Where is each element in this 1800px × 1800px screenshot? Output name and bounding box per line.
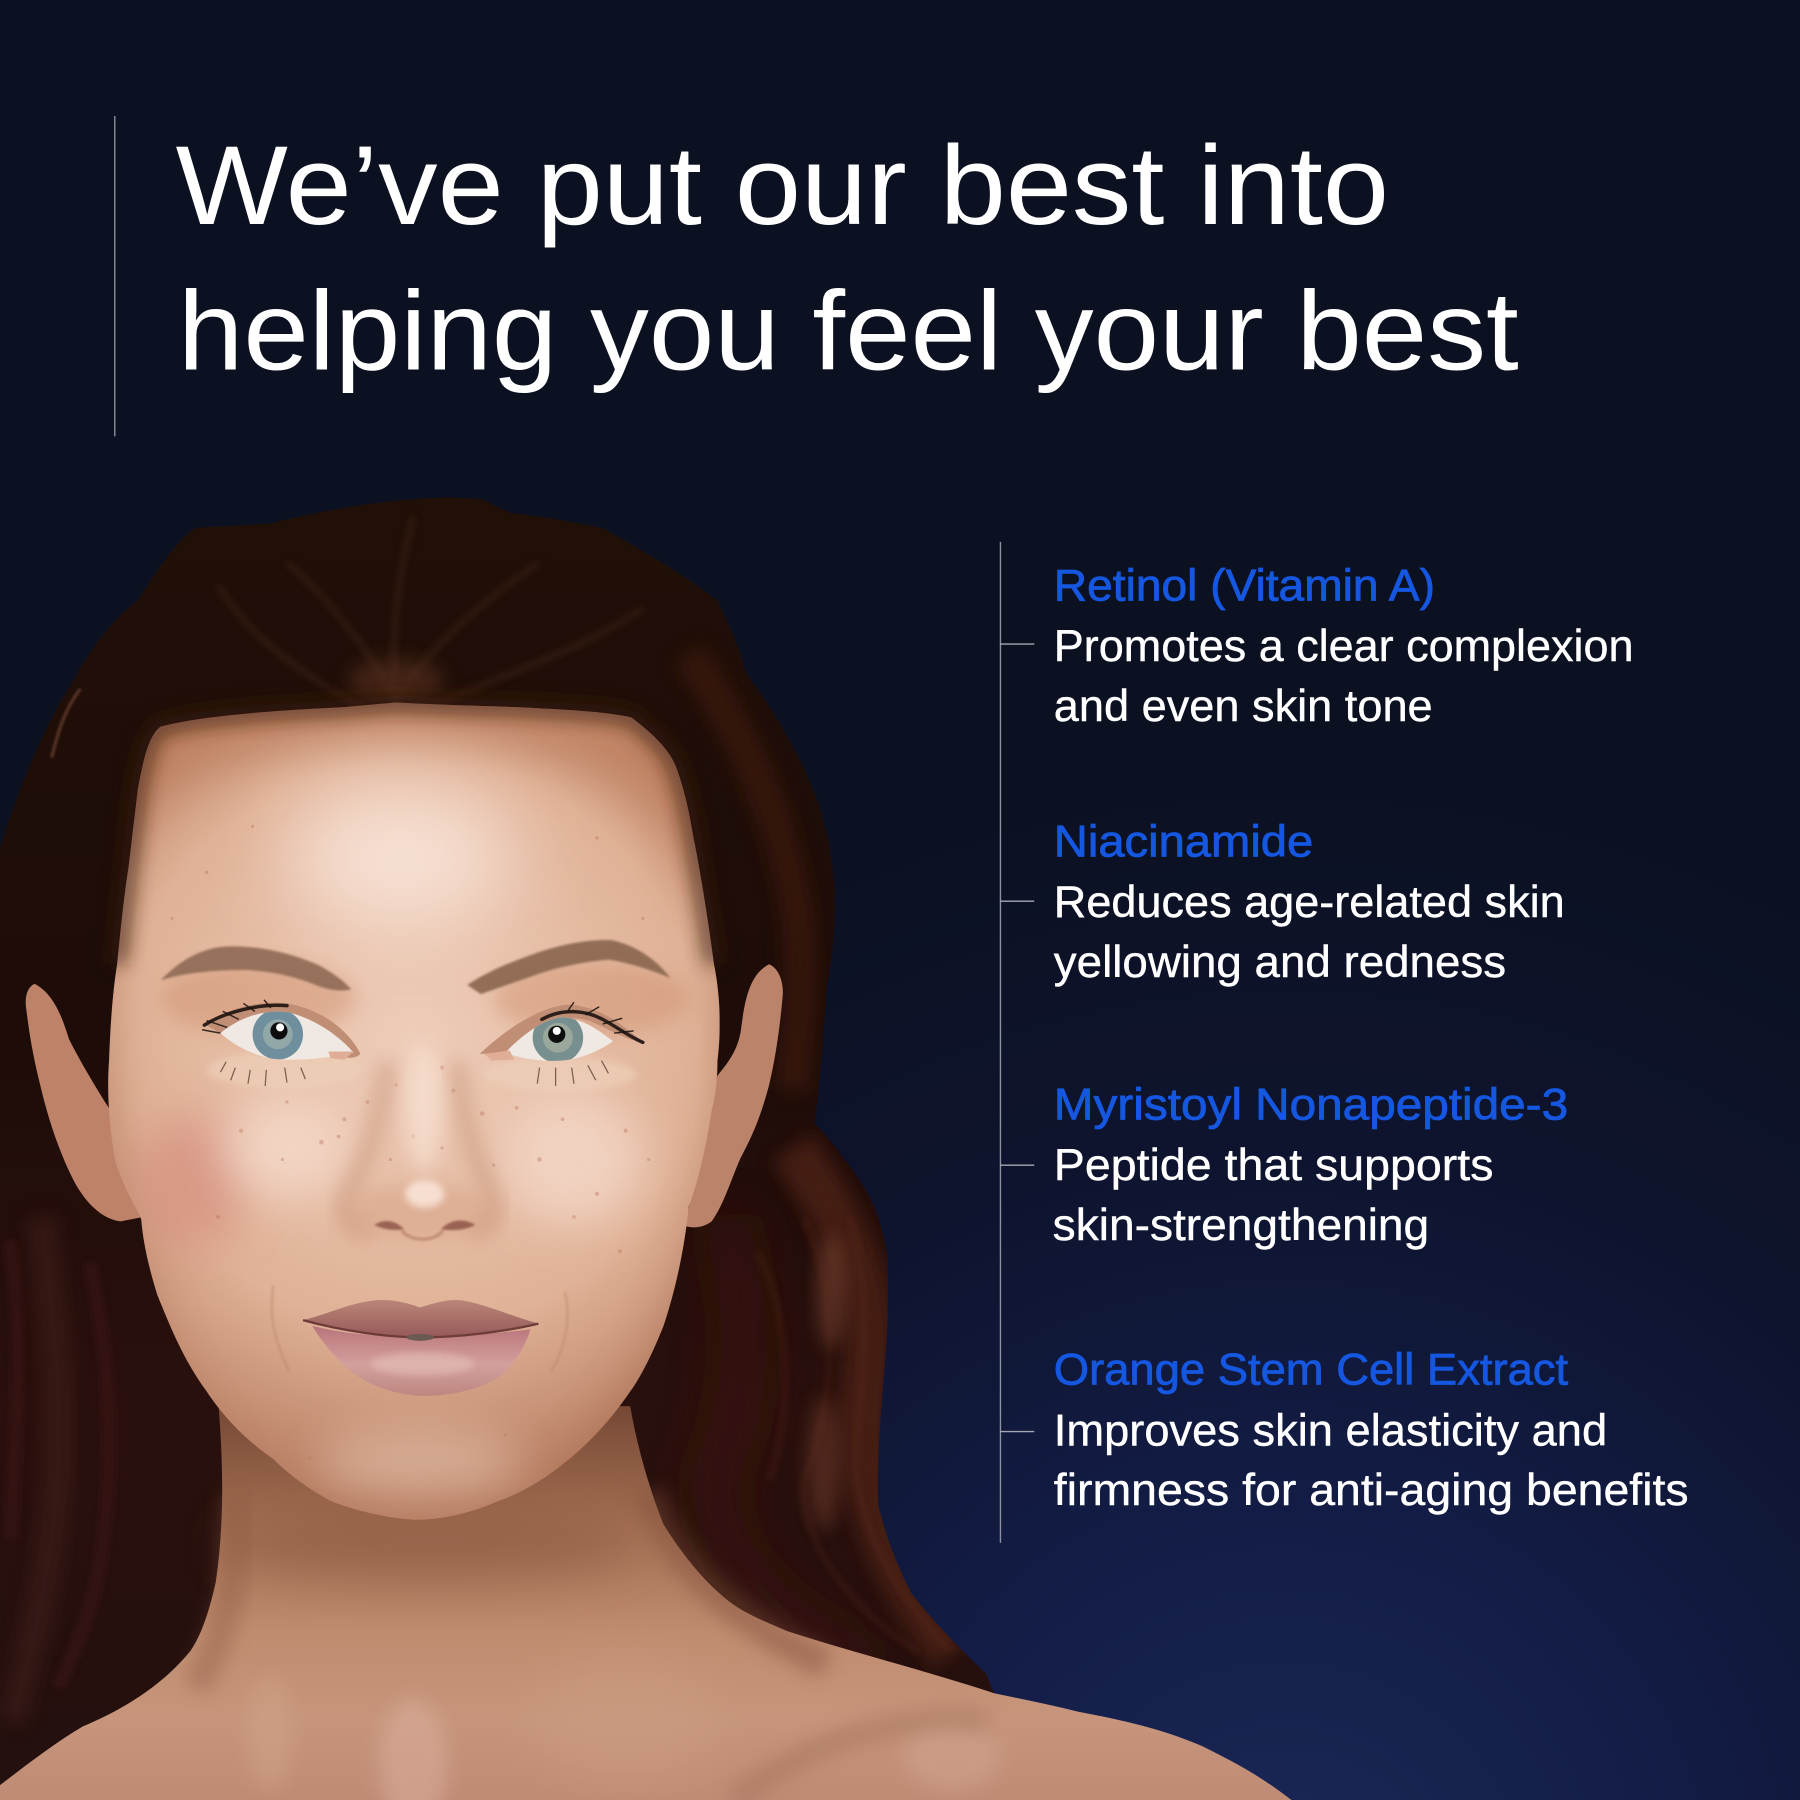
portrait of woman — [0, 498, 1291, 1800]
title — [176, 122, 1519, 394]
hair — [0, 498, 994, 1800]
hairline softening — [117, 703, 714, 964]
ingredient: Orange Stem Cell Extract — [1000, 1344, 1689, 1515]
eyebrow right — [467, 940, 670, 994]
right ear — [685, 964, 783, 1227]
right eye — [480, 1002, 643, 1092]
headline divider line — [114, 116, 116, 436]
freckles — [171, 825, 650, 1460]
face — [108, 702, 720, 1520]
ingredient: Orange Stem Cell Extract: Orange Stem Cell Extract — [1054, 1344, 1569, 1394]
ingredient: Retinol: and even skin tone — [1054, 681, 1433, 731]
ingredient: Niacinamide: Reduces age-related skin — [1054, 877, 1565, 927]
ingredient: Niacinamide — [1000, 816, 1565, 987]
left eye — [202, 1000, 363, 1088]
eyebrow left — [161, 946, 351, 990]
left side streaks — [11, 1217, 59, 1722]
top hair highlights — [219, 520, 640, 696]
ingredient: Myristoyl Nonapeptide-3 — [1000, 1079, 1568, 1250]
ingredient: Myristoyl Nonapeptide-3: Peptide that supports — [1054, 1140, 1493, 1190]
timeline rail — [999, 542, 1001, 1543]
left ear — [26, 984, 143, 1221]
ingredient: Myristoyl Nonapeptide-3: Myristoyl Nonapeptide-3 — [1054, 1079, 1568, 1129]
ingredient: Myristoyl Nonapeptide-3: skin-strengthening — [1053, 1200, 1429, 1250]
smile lines — [272, 1286, 567, 1372]
ingredient: Niacinamide: yellowing and redness — [1054, 937, 1506, 987]
ingredient: Orange Stem Cell Extract: firmness for anti-aging benefits — [1054, 1465, 1689, 1515]
title: helping you feel your best — [178, 268, 1519, 394]
ingredient: Retinol: Retinol (Vitamin A) — [1054, 560, 1435, 610]
ingredient: Retinol: Promotes a clear complexion — [1054, 621, 1634, 671]
right side warm tone — [792, 1148, 953, 1653]
ingredient: Niacinamide: Niacinamide — [1054, 816, 1313, 866]
neck and shoulders — [0, 1401, 1291, 1800]
lips — [303, 1300, 538, 1396]
title: We’ve put our best into — [176, 122, 1389, 248]
ingredient: Retinol — [1000, 560, 1634, 731]
ingredient: Orange Stem Cell Extract: Improves skin elasticity and — [1054, 1405, 1607, 1455]
forehead hairline shade — [134, 702, 699, 890]
nose — [345, 1045, 494, 1239]
